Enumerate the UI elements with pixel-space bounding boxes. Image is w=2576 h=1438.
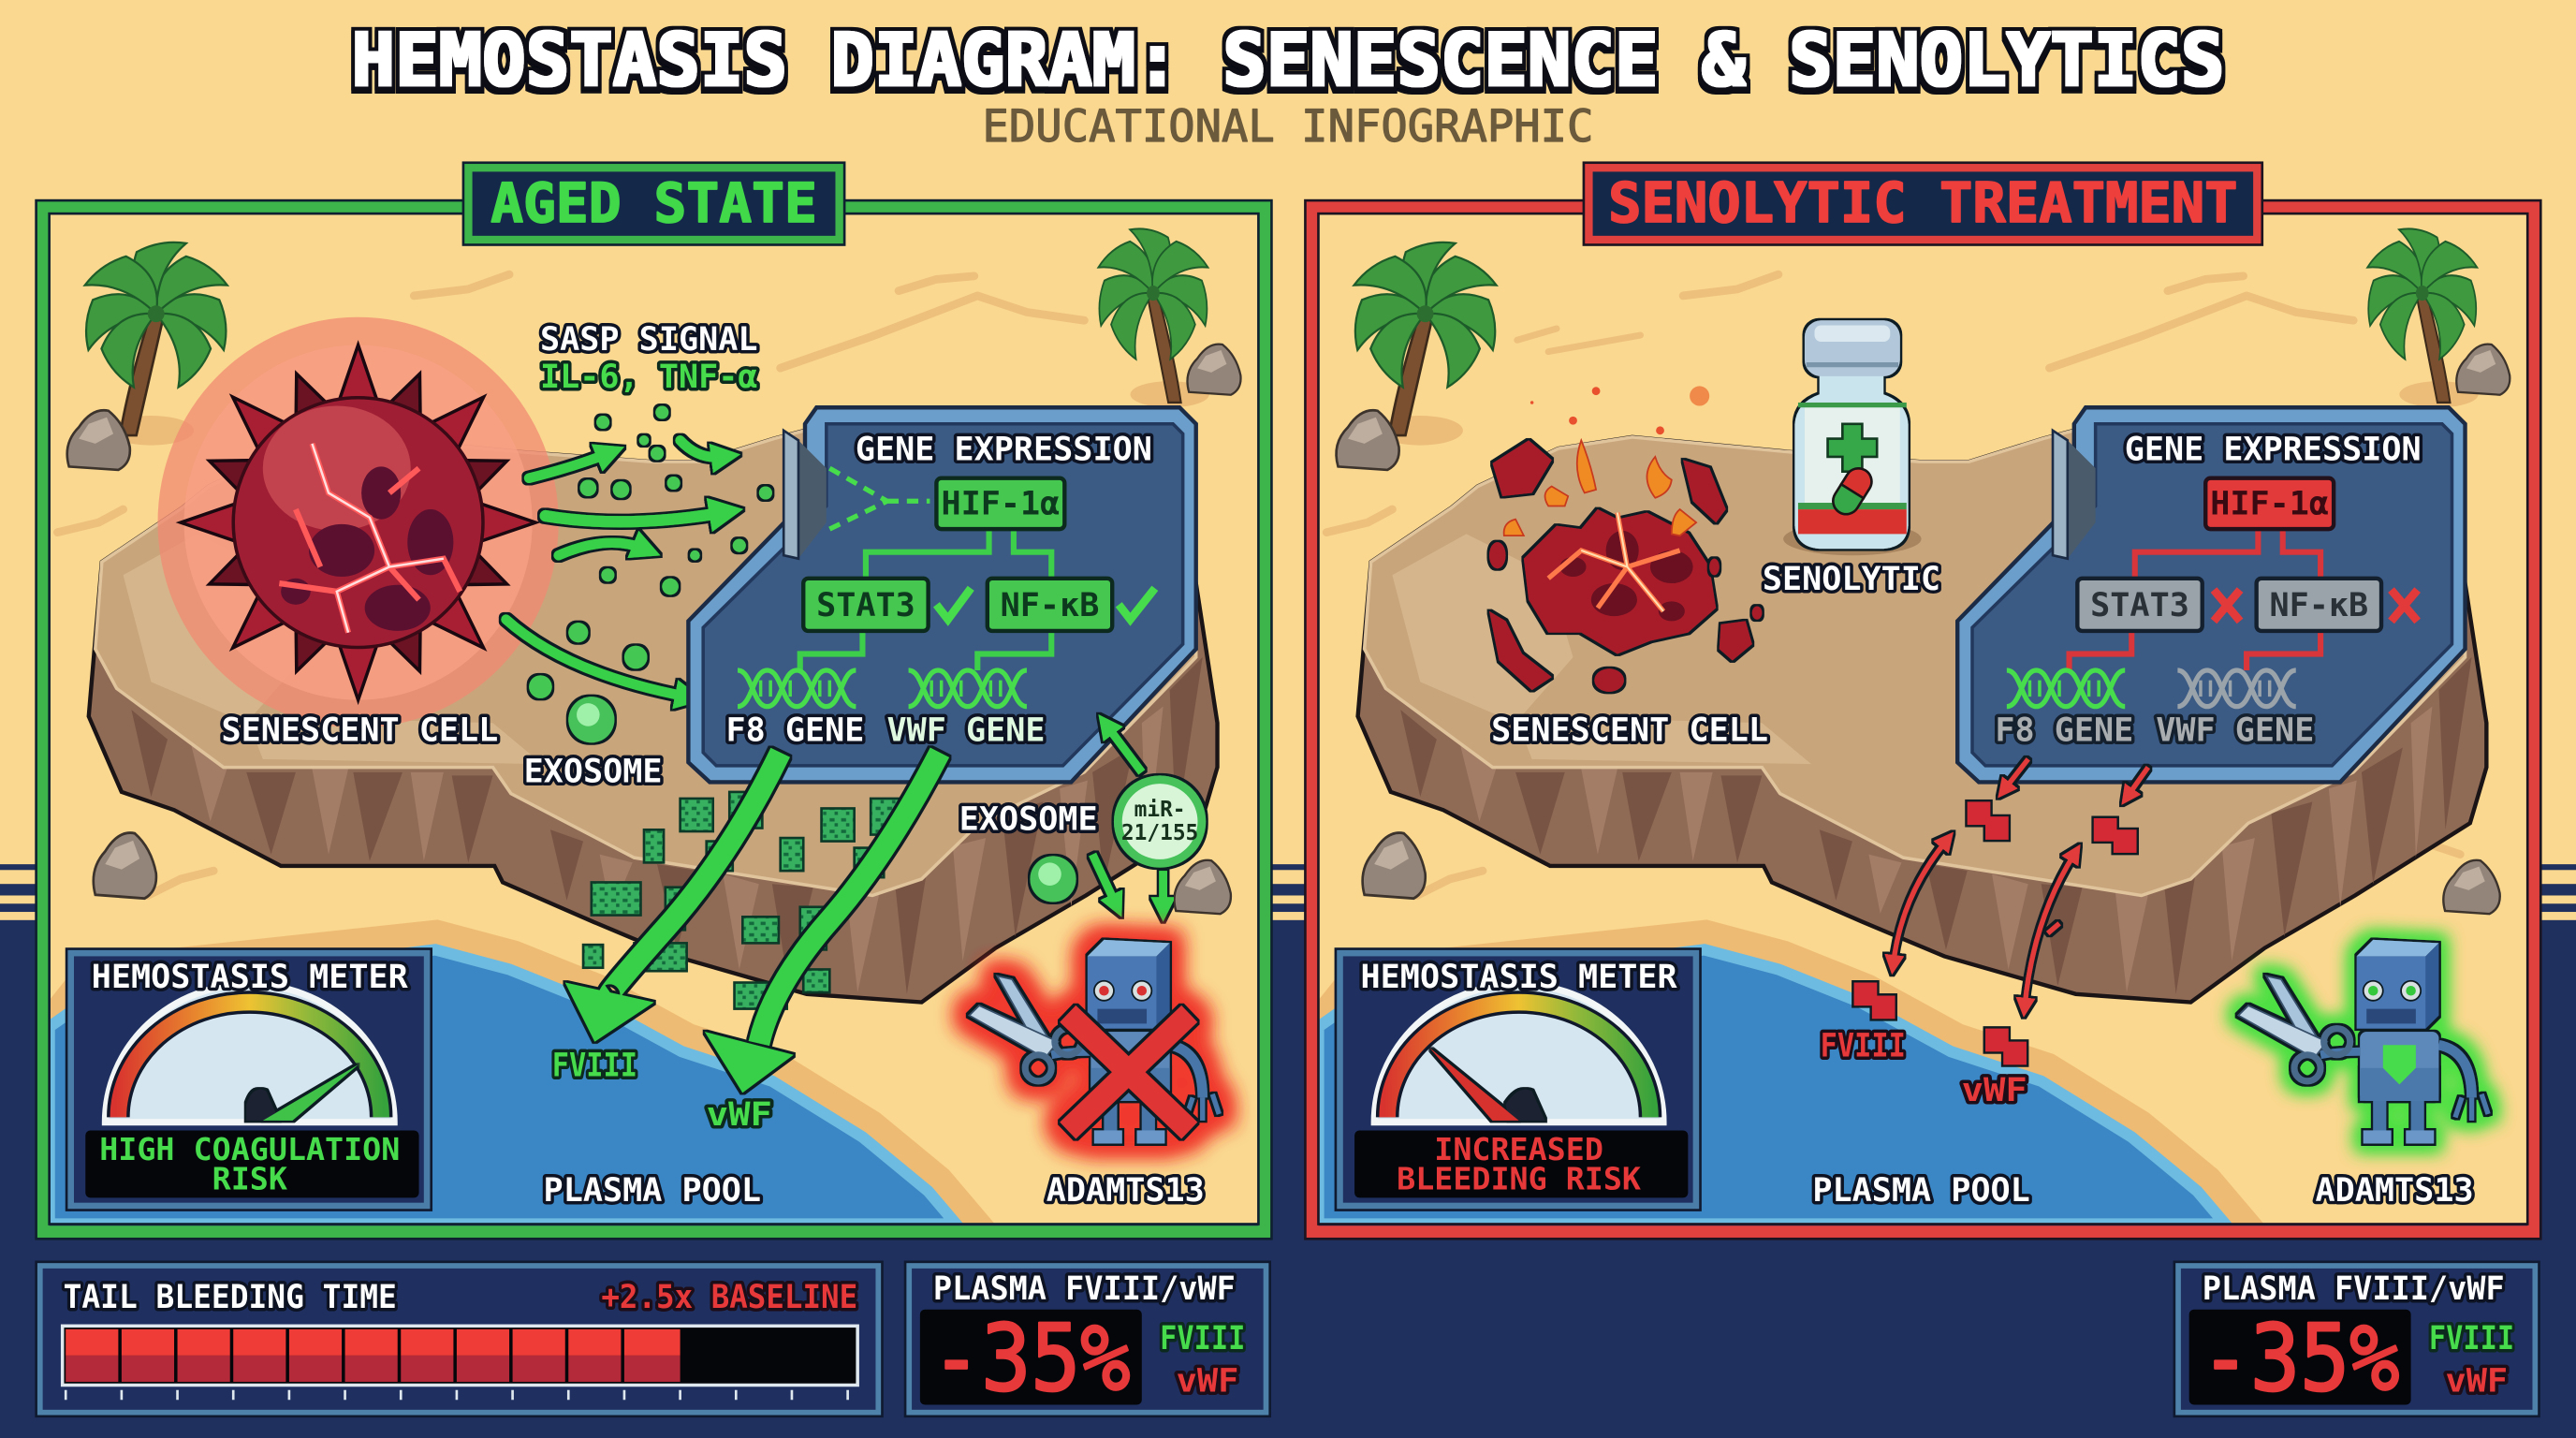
status: increased bleeding risk [1397,1131,1641,1197]
status: high coagulation risk: RISK [212,1161,287,1197]
node: STAT3: STAT3 [2090,586,2189,624]
panel frame [1305,200,2540,1239]
red protein clusters [1854,801,2137,1064]
icon: F8 DNA [2007,670,2125,707]
checkmarks [936,588,1155,620]
status: high coagulation risk: HIGH COAGULATION [99,1131,400,1167]
label: ADAMTS13: ADAMTS13 [2316,1171,2474,1210]
plasma FVIII/vWF readout, aged [905,1262,1270,1416]
miR exosome: miR- [1134,798,1186,822]
arrows: exosome [1092,726,1164,907]
needle [246,1064,359,1121]
label: FVIII: FVIII [552,1047,637,1085]
label: hemostasis meter: HEMOSTASIS METER [92,958,409,996]
hemostasis meter [66,949,432,1211]
node: NF-kB: NF-κB [2269,586,2368,624]
panel heading: aged state [463,163,844,244]
ADAMTS13 robot, inhibited [970,940,1219,1143]
plasma FVIII/vWF readout, aged: vWF [1177,1362,1238,1401]
panel background scene: sand, island, water [50,213,1258,1224]
sparks [1530,386,1709,434]
value: baseline multiple: +2.5x BASELINE [601,1278,857,1316]
tail bleeding time panel [37,1262,882,1416]
plasma FVIII/vWF readout, treatment: -35% [2201,1306,2399,1413]
exosome particle [568,697,614,742]
status: high coagulation risk [99,1131,400,1197]
node: STAT3 [803,579,929,631]
label: exosome 2: EXOSOME [959,800,1098,838]
status: increased bleeding risk: BLEEDING RISK [1397,1161,1641,1197]
node: HIF-1alpha: HIF-1α [2210,484,2329,522]
ADAMTS13 robot, active [2238,940,2488,1143]
SASP arrows and particles [506,405,772,698]
icon: F8 DNA [738,670,856,707]
panel heading: senolytic treatment: SENOLYTIC TREATMENT [1608,170,2238,235]
label: IL-6, TNF-alpha: IL-6, TNF-α [540,358,757,396]
panel: senolytic treatment [1305,163,2540,1416]
node: HIF-1alpha [936,478,1064,529]
hemostasis meter [1336,949,1701,1211]
label: FVIII: FVIII [1821,1026,1906,1064]
connector lines [2070,529,2320,670]
panel: aged state [37,163,1271,1239]
icon: green cross [1828,424,1877,472]
label: F8 gene: F8 GENE [726,712,864,750]
plasma FVIII/vWF readout, aged: -35% [931,1306,1131,1413]
bar chart: bleeding time [63,1326,857,1400]
label: vWF: vWF [707,1095,772,1134]
label: senolytic: SENOLYTIC [1763,560,1940,598]
label: ADAMTS13: ADAMTS13 [1046,1171,1205,1210]
title: HEMOSTASIS DIAGRAM: SENESCENCE & SENOLYTICS [352,19,2224,103]
label: gene expression: GENE EXPRESSION [2125,430,2422,468]
node: NF-kB [2257,579,2381,631]
panel frame [37,200,1271,1239]
arrow: VWF to vWF [705,753,940,1093]
label: gene expression: GENE EXPRESSION [856,430,1152,468]
flames [1504,440,1696,536]
node: NF-kB [988,579,1112,631]
gene expression box [1957,407,2466,782]
panel heading: aged state: AGED STATE [490,171,817,235]
bottle: senolytic [1783,320,1922,555]
label: senescent cell: SENESCENT CELL [1491,712,1768,750]
exosome particle 2 [1030,856,1076,902]
label: F8 gene: F8 GENE [1995,712,2133,750]
plasma FVIII/vWF readout, treatment [2174,1262,2539,1416]
label: SASP signal: SASP SIGNAL [540,320,757,359]
node: HIF-1alpha: HIF-1α [941,484,1060,522]
label: VWF gene: VWF GENE [2156,712,2314,750]
icon: VWF DNA [909,670,1027,707]
protein blocks [583,792,907,1009]
label: vWF: vWF [1962,1071,2027,1109]
subtitle: EDUCATIONAL INFOGRAPHIC [983,101,1593,153]
plasma FVIII/vWF readout, aged: PLASMA FVIII/vWF [933,1269,1236,1308]
needle [1430,1049,1545,1121]
ruptured senescent cell [1489,386,1762,692]
label: exosome: EXOSOME [524,752,663,790]
status: increased bleeding risk: INCREASED [1434,1131,1603,1167]
miR exosome [1114,775,1206,868]
red X marks [2214,590,2418,621]
plasma FVIII/vWF readout, treatment: vWF [2445,1362,2508,1401]
node: HIF-1alpha [2205,478,2334,529]
label: tail bleeding time: TAIL BLEEDING TIME [64,1278,397,1316]
miR exosome: 21/155 [1121,821,1198,845]
label: senescent cell: SENESCENT CELL [221,712,498,750]
icon: VWF DNA [2177,670,2296,707]
panel background scene [1318,213,2527,1224]
plasma FVIII/vWF readout, treatment: FVIII [2429,1319,2514,1357]
gene expression box [688,407,1196,782]
senescent cell [157,317,559,727]
label: hemostasis meter: HEMOSTASIS METER [1361,958,1677,996]
red arrows [1894,759,2148,1005]
node: NF-kB: NF-κB [1001,586,1099,624]
icon: capsule [1828,463,1877,520]
plasma FVIII/vWF readout, treatment: PLASMA FVIII/vWF [2203,1269,2505,1308]
label: plasma pool: PLASMA POOL [544,1171,761,1210]
cone of green dashes [829,468,929,529]
arrow: F8 to FVIII [565,753,781,1042]
node: STAT3 [2077,579,2203,631]
label: VWF gene: VWF GENE [886,712,1046,750]
fragments [1489,440,1762,692]
node: STAT3: STAT3 [816,586,915,624]
label: plasma pool: PLASMA POOL [1812,1171,2030,1210]
plasma FVIII/vWF readout, aged: FVIII [1160,1319,1245,1357]
connector lines [800,529,1051,670]
